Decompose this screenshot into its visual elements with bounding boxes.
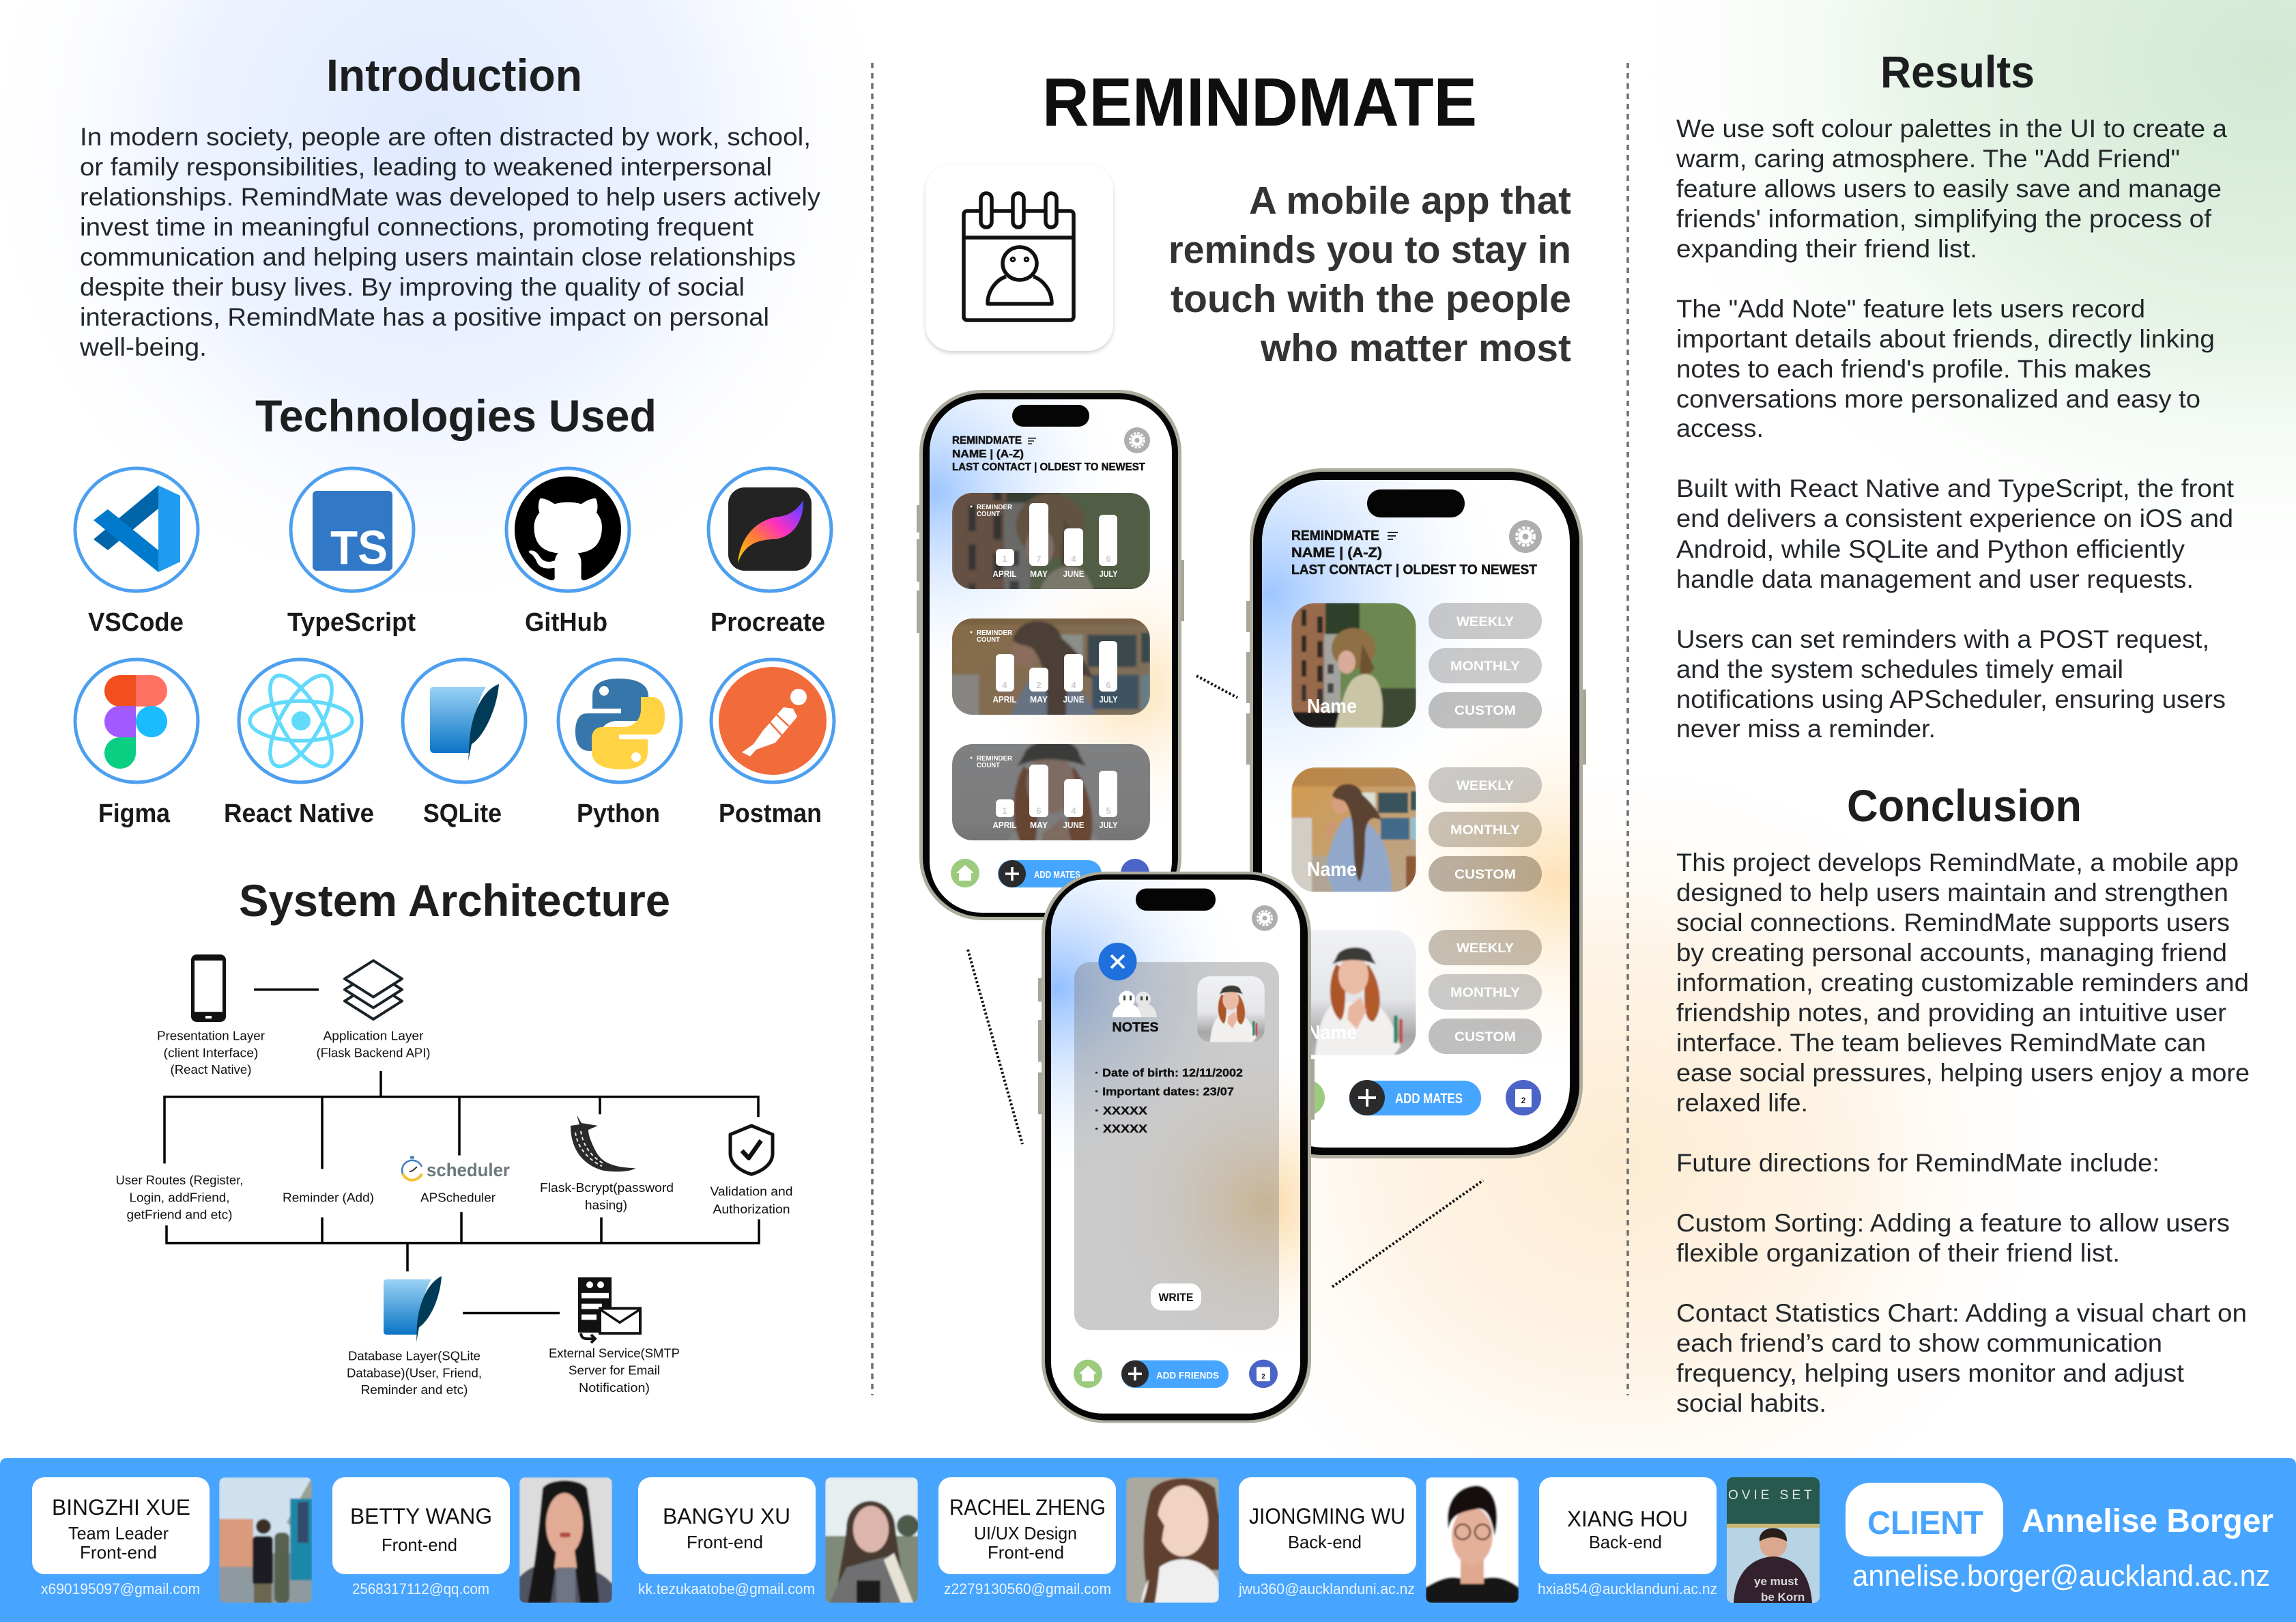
photo: OVIE SET <box>1728 1488 1816 1503</box>
friend 3 frequency buttons: CUSTOM <box>1454 1030 1516 1044</box>
heading: System Architecture: System Architecture <box>239 875 670 926</box>
bottom nav: ADD MATES <box>1034 869 1080 881</box>
photo <box>519 1477 612 1603</box>
friend 2 photo: Name <box>1307 859 1357 881</box>
icon: VSCode <box>75 468 198 591</box>
phone: reminder chart screen <box>917 390 1184 920</box>
tech labels: SQLite <box>423 799 502 828</box>
friend 1 frequency buttons: MONTHLY <box>1450 659 1520 674</box>
text block: introduction body <box>79 123 821 361</box>
label: validation: Authorization <box>713 1203 790 1216</box>
notes list: · Date of birth: 12/11/2002 <box>1095 1066 1243 1079</box>
text block: results body: Built with React Native and TypeScript, the front <box>1676 474 2235 502</box>
text block: results body: Users can set reminders with a POST request, <box>1676 625 2209 653</box>
architecture diagram <box>116 954 792 1397</box>
card 3 chart: 6 <box>1036 806 1042 816</box>
card 1 chart: COUNT <box>977 511 1000 518</box>
friend 3 frequency buttons: MONTHLY <box>1450 986 1520 1000</box>
member: Betty Wang: 2568317112@qq.com <box>352 1580 489 1597</box>
friend 1 photo <box>1291 603 1416 728</box>
icon: Postman <box>711 659 834 782</box>
label: flask bcrypt: hasing) <box>585 1199 627 1212</box>
bottom nav: ADD MATES <box>1395 1091 1463 1107</box>
friend 1 frequency buttons: CUSTOM <box>1454 704 1516 718</box>
text block: conclusion body: by creating personal accounts, managing friend <box>1676 939 2227 967</box>
bottom nav <box>951 859 1149 887</box>
text block: conclusion body: This project develops RemindMate, a mobile app <box>1676 849 2239 877</box>
tagline: A mobile app that <box>1249 179 1571 223</box>
card 2 chart: JULY <box>1099 694 1118 705</box>
member: Rachel Zheng: UI/UX Design <box>974 1523 1077 1543</box>
member: Bingzhi Xue: Team Leader <box>68 1523 169 1543</box>
photo <box>1126 1477 1219 1603</box>
label: application layer: (Flask Backend API) <box>317 1046 430 1060</box>
text block: introduction body: In modern society, people are often distracted by work, school, <box>80 123 811 151</box>
card 2 chart: JUNE <box>1063 694 1085 705</box>
friend 3 photo <box>1291 930 1416 1055</box>
card 1 chart: MAY <box>1030 569 1048 579</box>
card 3 chart: MAY <box>1030 820 1048 830</box>
label: database layer <box>347 1350 482 1397</box>
label: flask bcrypt: Flask-Bcrypt(password <box>540 1181 674 1195</box>
tech icons: VSCode, TypeScript, GitHub, Procreate, Figma, React Native, SQLite, Python, Postman <box>75 468 834 782</box>
icon: shield <box>730 1126 773 1174</box>
text block: conclusion body: designed to help users maintain and strengthen <box>1676 879 2228 907</box>
header text: NAME | (A-Z) <box>1291 545 1382 560</box>
icon: presentation layer phone <box>191 954 226 1022</box>
heading: Conclusion: Conclusion <box>1847 780 2082 831</box>
text block: results body: feature allows users to easily save and manage <box>1676 175 2222 203</box>
card 2 chart: 2 <box>1036 680 1042 690</box>
friend 2 frequency buttons <box>1429 767 1542 892</box>
card 3 chart: 5 <box>1106 806 1111 816</box>
tech labels: GitHub <box>525 608 607 637</box>
text block: results body: notifications using APScheduler, ensuring users <box>1676 685 2226 713</box>
text block: results body: warm, caring atmosphere. The "Add Friend" <box>1676 145 2180 173</box>
text block: results body: notes to each friend's profile. This makes <box>1676 355 2151 383</box>
friend 3 frequency buttons <box>1429 930 1542 1054</box>
icon: settings gear <box>1509 520 1542 553</box>
card 1 chart: APRIL <box>992 569 1017 579</box>
card 2 chart: 4 <box>1002 680 1007 690</box>
icon: settings gear <box>1252 905 1278 931</box>
tagline <box>1168 179 1571 370</box>
label: validation: Validation and <box>710 1185 792 1199</box>
label: presentation layer: (React Native) <box>170 1063 251 1077</box>
connector lines <box>164 990 759 1313</box>
header text: REMINDMATE <box>952 435 1022 446</box>
team banner <box>0 1458 2296 1622</box>
label: user routes <box>116 1173 243 1222</box>
label: application layer: Application Layer <box>323 1029 423 1044</box>
header text: LAST CONTACT | OLDEST TO NEWEST <box>952 461 1146 473</box>
label: presentation layer <box>157 1029 265 1077</box>
label: application layer <box>317 1029 430 1060</box>
friend 1 frequency buttons <box>1429 603 1542 728</box>
text block: conclusion body: interface. The team believes RemindMate can <box>1676 1029 2206 1057</box>
card 3 chart: 1 <box>1002 806 1007 816</box>
icon: calendar with person <box>964 193 1074 320</box>
icon: email server <box>578 1277 640 1343</box>
text block: results body: end delivers a consistent experience on iOS and <box>1676 504 2233 532</box>
card 3 chart <box>952 744 1150 840</box>
member: Bingzhi Xue: x690195097@gmail.com <box>41 1580 200 1597</box>
label: NOTES: NOTES <box>1112 1020 1158 1035</box>
notes list <box>1095 1066 1243 1135</box>
friend photo <box>1197 976 1265 1042</box>
text block: results body: Android, while SQLite and Python efficiently <box>1676 535 2185 563</box>
member: Betty Wang: Front-end <box>382 1535 457 1555</box>
text block: conclusion body: each friend’s card to show communication <box>1676 1329 2162 1357</box>
header text <box>952 435 1146 473</box>
card 1 chart: JULY <box>1099 569 1118 579</box>
text block: conclusion body <box>1676 849 2250 1417</box>
heading: Introduction: Introduction <box>326 50 582 100</box>
label: flask bcrypt <box>540 1181 674 1212</box>
card 2 chart: MAY <box>1030 694 1048 705</box>
text block: introduction body: or family responsibilities, leading to weakened interpersonal <box>80 153 772 181</box>
header text: LAST CONTACT | OLDEST TO NEWEST <box>1291 563 1537 578</box>
heading: Results: Results <box>1880 46 2035 97</box>
friend 2 frequency buttons: CUSTOM <box>1454 868 1516 882</box>
write button: WRITE <box>1159 1291 1193 1304</box>
photo <box>1426 1477 1519 1603</box>
icon: SQLite <box>403 659 526 782</box>
text block: results body: The "Add Note" feature lets users record <box>1676 295 2145 323</box>
photo <box>219 1477 312 1603</box>
app icon tile <box>925 165 1113 351</box>
icon: database sqlite <box>384 1276 442 1342</box>
label: presentation layer: (client Interface) <box>163 1046 258 1060</box>
card 2 chart: 6 <box>1106 680 1111 690</box>
text block: results body: conversations more personalized and easy to <box>1676 385 2200 413</box>
text block: introduction body: well-being. <box>79 333 207 361</box>
member: Xiang Hou: Back-end <box>1589 1532 1662 1552</box>
icon: scheduler logo: scheduler <box>427 1160 511 1180</box>
icon: notes ghosts <box>1113 991 1157 1017</box>
text block: conclusion body: ease social pressures, helping users enjoy a more <box>1676 1059 2250 1087</box>
tech labels: Figma <box>98 799 171 828</box>
member: Rachel Zheng: RACHEL ZHENG <box>949 1495 1106 1520</box>
card 1 chart: 1 <box>1002 554 1007 564</box>
member: Jiongming Wu: jwu360@aucklanduni.ac.nz <box>1238 1580 1415 1597</box>
client block: annelise.borger@auckland.ac.nz <box>1852 1559 2270 1593</box>
bottom nav <box>1074 1360 1278 1388</box>
icon: React Native <box>239 659 362 782</box>
text block: introduction body: interactions, RemindMate has a positive impact on personal <box>80 303 769 331</box>
bottom nav: 2 <box>1261 1373 1265 1380</box>
label: database layer: Database Layer(SQLite <box>348 1350 480 1364</box>
label: user routes: User Routes (Register, <box>116 1173 243 1188</box>
label: APScheduler: APScheduler <box>420 1191 496 1206</box>
member: Bingzhi Xue <box>32 1477 312 1603</box>
label: presentation layer: Presentation Layer <box>157 1029 265 1044</box>
client block <box>1846 1483 2273 1593</box>
card 3 chart: COUNT <box>977 762 1000 769</box>
photo <box>1727 1477 1820 1604</box>
photo: be Korn <box>1761 1591 1805 1604</box>
label: external service: External Service(SMTP <box>549 1347 680 1361</box>
text block: results body: friends' information, simplifying the process of <box>1676 205 2212 233</box>
tech labels: Procreate <box>711 608 825 637</box>
icon: application layer stack <box>345 961 402 1019</box>
member: Jiongming Wu: Back-end <box>1288 1532 1362 1552</box>
text block: results body: access. <box>1676 414 1764 442</box>
write button <box>1151 1283 1201 1311</box>
card 3 chart: JULY <box>1099 820 1118 830</box>
tech labels: Postman <box>719 799 822 828</box>
member: Betty Wang: BETTY WANG <box>350 1504 492 1528</box>
phone: friends list screen <box>1246 468 1586 1158</box>
card 1 chart: 6 <box>1106 554 1111 564</box>
tagline: touch with the people <box>1171 277 1571 321</box>
bottom nav <box>1289 1080 1541 1115</box>
photo: ye must <box>1754 1575 1798 1588</box>
notes list: · XXXXX <box>1095 1122 1148 1135</box>
icon: Figma <box>75 659 198 782</box>
card 2 chart: COUNT <box>977 636 1000 644</box>
text block: conclusion body: social connections. RemindMate supports users <box>1676 909 2230 937</box>
card 2 chart: 4 <box>1071 680 1076 690</box>
dotted connector lines between phones <box>968 676 1483 1287</box>
tech labels: React Native <box>224 799 374 828</box>
card 3 chart: APRIL <box>992 820 1017 830</box>
icon: settings gear <box>1124 427 1150 453</box>
text block: conclusion body: relaxed life. <box>1676 1089 1808 1117</box>
label: external service <box>549 1347 680 1395</box>
member: Xiang Hou: XIANG HOU <box>1567 1507 1688 1531</box>
icon: TypeScript <box>291 468 414 591</box>
member: Rachel Zheng: z2279130560@gmail.com <box>944 1580 1111 1597</box>
friend 3 photo: Name <box>1307 1022 1357 1044</box>
card 3 chart: REMINDER <box>977 755 1013 763</box>
card 1 chart: 4 <box>1071 554 1076 564</box>
heading: Technologies Used: Technologies Used <box>255 390 657 441</box>
text block: results body: important details about friends, directly linking <box>1676 325 2215 353</box>
member: Jiongming Wu <box>1238 1477 1519 1603</box>
card 1 chart: JUNE <box>1063 569 1085 579</box>
label: validation <box>710 1185 792 1216</box>
text block: results body: handle data management and user requests. <box>1676 565 2194 593</box>
client block: Annelise Borger <box>2022 1503 2273 1539</box>
label: user routes: Login, addFriend, <box>129 1191 229 1206</box>
text block: results body: and the system schedules timely email <box>1676 655 2123 683</box>
notes list: · XXXXX <box>1095 1104 1148 1117</box>
icon: Procreate <box>708 468 831 591</box>
client block: CLIENT <box>1867 1505 1983 1541</box>
text block: conclusion body: friendship notes, and providing an intuitive user <box>1676 999 2226 1027</box>
text block: results body <box>1676 115 2235 743</box>
member: Xiang Hou: hxia854@aucklanduni.ac.nz <box>1538 1580 1717 1597</box>
text block: results body: never miss a reminder. <box>1676 715 1936 743</box>
tech labels: TypeScript <box>287 608 416 637</box>
icon: scheduler logo <box>402 1156 511 1180</box>
close button <box>1099 943 1137 980</box>
label: database layer: Reminder and etc) <box>360 1383 468 1397</box>
member: Bangyu Xu: kk.tezukaatobe@gmail.com <box>638 1580 815 1597</box>
text block: conclusion body: social habits. <box>1676 1389 1826 1417</box>
text block: introduction body: despite their busy lives. By improving the quality of social <box>80 273 745 301</box>
tech labels: Python <box>577 799 660 828</box>
icon: Python <box>558 659 681 782</box>
text block: conclusion body: frequency, helping users monitor and adjust <box>1676 1359 2185 1387</box>
text block: conclusion body: Custom Sorting: Adding a feature to allow users <box>1676 1209 2230 1237</box>
friend 1 frequency buttons: WEEKLY <box>1456 615 1514 629</box>
label: reminder: Reminder (Add) <box>283 1191 374 1206</box>
icon: flask horn <box>571 1115 635 1171</box>
friend 1 photo: Name <box>1307 696 1357 717</box>
label: database layer: Database)(User, Friend, <box>347 1366 482 1380</box>
friend 3 frequency buttons: WEEKLY <box>1456 941 1514 956</box>
tech labels: VSCode <box>88 608 184 637</box>
header text: REMINDMATE <box>1291 528 1379 543</box>
friend 2 photo <box>1291 767 1416 892</box>
text block: conclusion body: information, creating customizable reminders and <box>1676 969 2249 997</box>
text block: introduction body: invest time in meaningful connections, promoting frequent <box>80 213 754 241</box>
member: Xiang Hou <box>1538 1477 1820 1604</box>
label: external service: Server for Email <box>569 1363 660 1378</box>
notes list: · Important dates: 23/07 <box>1095 1085 1234 1098</box>
member: Jiongming Wu: JIONGMING WU <box>1249 1504 1405 1528</box>
card 2 chart <box>952 618 1150 715</box>
icon: TypeScript: TS <box>330 521 388 574</box>
member: Rachel Zheng: Front-end <box>988 1542 1064 1563</box>
text block: results body: We use soft colour palettes in the UI to create a <box>1676 115 2227 143</box>
text block: introduction body: relationships. RemindMate was developed to help users actively <box>80 183 821 211</box>
member: Bingzhi Xue: Front-end <box>80 1542 157 1563</box>
text block: conclusion body: Contact Statistics Chart: Adding a visual chart on <box>1676 1299 2247 1327</box>
text block: conclusion body: flexible organization of their friend list. <box>1676 1239 2120 1267</box>
card 1 chart: 7 <box>1036 554 1042 564</box>
title: REMINDMATE: REMINDMATE <box>1042 64 1477 141</box>
tech labels <box>88 608 825 828</box>
card 1 chart <box>952 493 1150 589</box>
member: Bingzhi Xue: BINGZHI XUE <box>52 1495 190 1520</box>
label: user routes: getFriend and etc) <box>127 1208 233 1222</box>
tagline: who matter most <box>1260 326 1571 370</box>
text block: results body: expanding their friend list. <box>1676 235 1977 263</box>
friend 2 frequency buttons: MONTHLY <box>1450 823 1520 838</box>
text block: conclusion body: Future directions for RemindMate include: <box>1676 1149 2159 1177</box>
member: Rachel Zheng <box>938 1477 1219 1603</box>
notes card <box>1074 943 1279 1330</box>
icon: GitHub <box>506 468 629 591</box>
card 1 chart: REMINDER <box>977 504 1013 511</box>
text block: introduction body: communication and helping users maintain close relationships <box>80 243 796 271</box>
card 3 chart: 4 <box>1071 806 1076 816</box>
photo <box>825 1477 919 1603</box>
card 2 chart: APRIL <box>992 694 1017 705</box>
member: Betty Wang <box>332 1477 612 1603</box>
tagline: reminds you to stay in <box>1168 228 1571 272</box>
member: Bangyu Xu: Front-end <box>687 1532 763 1552</box>
bottom nav: 2 <box>1521 1096 1526 1105</box>
card 3 chart: JUNE <box>1063 820 1085 830</box>
header text <box>1291 528 1537 578</box>
member: Bangyu Xu: BANGYU XU <box>663 1504 790 1528</box>
friend 2 frequency buttons: WEEKLY <box>1456 779 1514 793</box>
header text: NAME | (A-Z) <box>952 449 1024 460</box>
member: Bangyu Xu <box>638 1477 919 1603</box>
bottom nav: ADD FRIENDS <box>1156 1369 1219 1380</box>
card 2 chart: REMINDER <box>977 629 1013 637</box>
phone: notes screen <box>1038 872 1315 1423</box>
label: external service: Notification) <box>579 1381 650 1395</box>
